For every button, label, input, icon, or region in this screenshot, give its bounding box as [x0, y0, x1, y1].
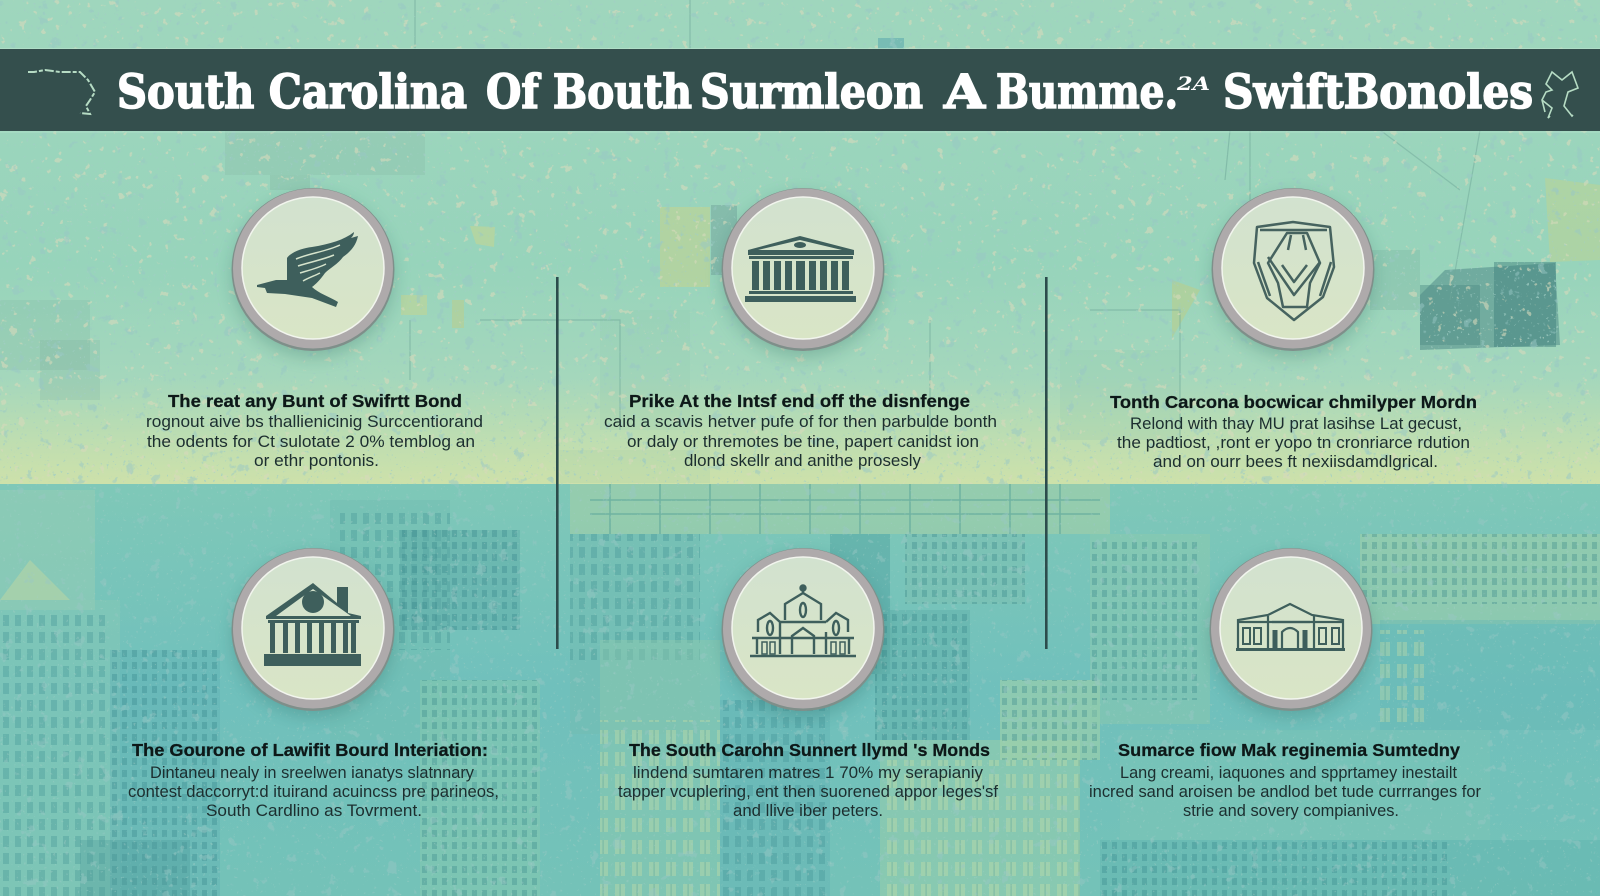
- text block: top right: [1110, 392, 1477, 471]
- text block: bottom centre: lindend sumtaren matres 1 70% my serapianiy: [633, 764, 984, 782]
- city left blocks: [0, 490, 540, 896]
- title word group: [486, 65, 1533, 120]
- banner edge lines: [0, 48, 1600, 132]
- text block: top centre: [604, 391, 997, 470]
- text block: bottom centre: [618, 740, 998, 820]
- icon: winged figure: [257, 232, 358, 307]
- text block: bottom centre: tapper vcuplering, ent then suorened appor leges'sf: [618, 783, 998, 801]
- text block: bottom right: [1089, 740, 1481, 820]
- text block: bottom left: [128, 740, 499, 820]
- title banner: [0, 48, 1600, 132]
- title word group: 2A: [1176, 73, 1210, 95]
- panel: top centre medallion: [722, 188, 884, 356]
- background: mint upper field: [0, 0, 1600, 484]
- text block: bottom left: contest daccorryt:d ituirand acuincss pre parineos,: [128, 783, 499, 801]
- divider: left: [556, 277, 559, 649]
- icon: right state outline: [1542, 72, 1578, 118]
- title word group: Bumme.: [996, 65, 1178, 120]
- panel: top right medallion: [1212, 188, 1374, 356]
- text block: top centre: Prike At the Intsf end off the disnfenge: [629, 391, 970, 411]
- text block: bottom right: Sumarce fiow Mak reginemia Sumtedny: [1118, 740, 1460, 760]
- text block: bottom right: strie and sovery compianives.: [1183, 802, 1399, 820]
- text block: top centre: caid a scavis hetver pufe of for then parbulde bonth: [604, 413, 997, 431]
- background: speckles: [0, 0, 1600, 484]
- text block: top centre: dlond skellr and anithe prosesly: [684, 452, 922, 470]
- background: map collage shapes: [0, 0, 1600, 483]
- icon: church: [750, 586, 856, 656]
- icon: shield with serpent: [1254, 222, 1334, 320]
- title word group: SwiftBonoles: [1223, 65, 1533, 120]
- icon: bank house: [264, 583, 361, 666]
- city right blocks: [1090, 534, 1600, 896]
- text block: bottom centre: The South Carohn Sunnert llymd 's Monds: [629, 740, 990, 760]
- icon: hall: [1236, 604, 1345, 650]
- icon: left state outline: [28, 70, 95, 114]
- city centre blocks: [570, 484, 1110, 896]
- panel: bottom right medallion: [1210, 548, 1372, 716]
- text block: bottom left: The Gourone of Lawifit Bourd lnteriation:: [132, 740, 488, 760]
- text block: bottom left: South Cardlino as Tovrment.: [206, 802, 422, 820]
- text block: top left: the odents for Ct sulotate 2 0% temblog an: [147, 433, 475, 451]
- text block: top right: Relond with thay MU prat lasihse Lat gecust,: [1130, 415, 1462, 433]
- title word group: A: [943, 65, 986, 120]
- title word group: Surmleon: [700, 65, 923, 120]
- title text: South Carolina: [117, 65, 467, 120]
- text block: bottom right: Lang creami, iaquones and spprtamey inestailt: [1120, 764, 1457, 782]
- panel: bottom left medallion: [232, 548, 394, 716]
- panel: top left medallion: [232, 188, 394, 356]
- title word group: Of Bouth: [486, 65, 692, 120]
- text block: top centre: or daly or thremotes be tine, papert canidst ion: [627, 433, 979, 451]
- divider: right: [1045, 277, 1048, 649]
- text block: bottom right: incred sand aroisen be andlod bet tude currranges for: [1089, 783, 1481, 801]
- text block: top right: the padtiost, ,ront er yopo tn cronriarce rdution: [1117, 434, 1470, 452]
- text block: top right: Tonth Carcona bocwicar chmilyper Mordn: [1110, 392, 1477, 412]
- text block: top left: The reat any Bunt of Swifrtt Bond: [168, 391, 462, 411]
- text block: top right: and on ourr bees ft nexiisdamdlgrical.: [1153, 453, 1438, 471]
- text block: top left: [146, 391, 483, 470]
- text block: top left: rognout aive bs thallienicinig Surccentiorand: [146, 413, 483, 431]
- text block: top left: or ethr pontonis.: [254, 452, 379, 470]
- icon: temple: [745, 236, 856, 302]
- background: city skyline: [0, 484, 1600, 896]
- text block: bottom centre: and llive iber peters.: [733, 802, 883, 820]
- panel: bottom centre medallion: [722, 548, 884, 716]
- text block: bottom left: Dintaneu nealy in sreelwen ianatys slatnnary: [150, 764, 475, 782]
